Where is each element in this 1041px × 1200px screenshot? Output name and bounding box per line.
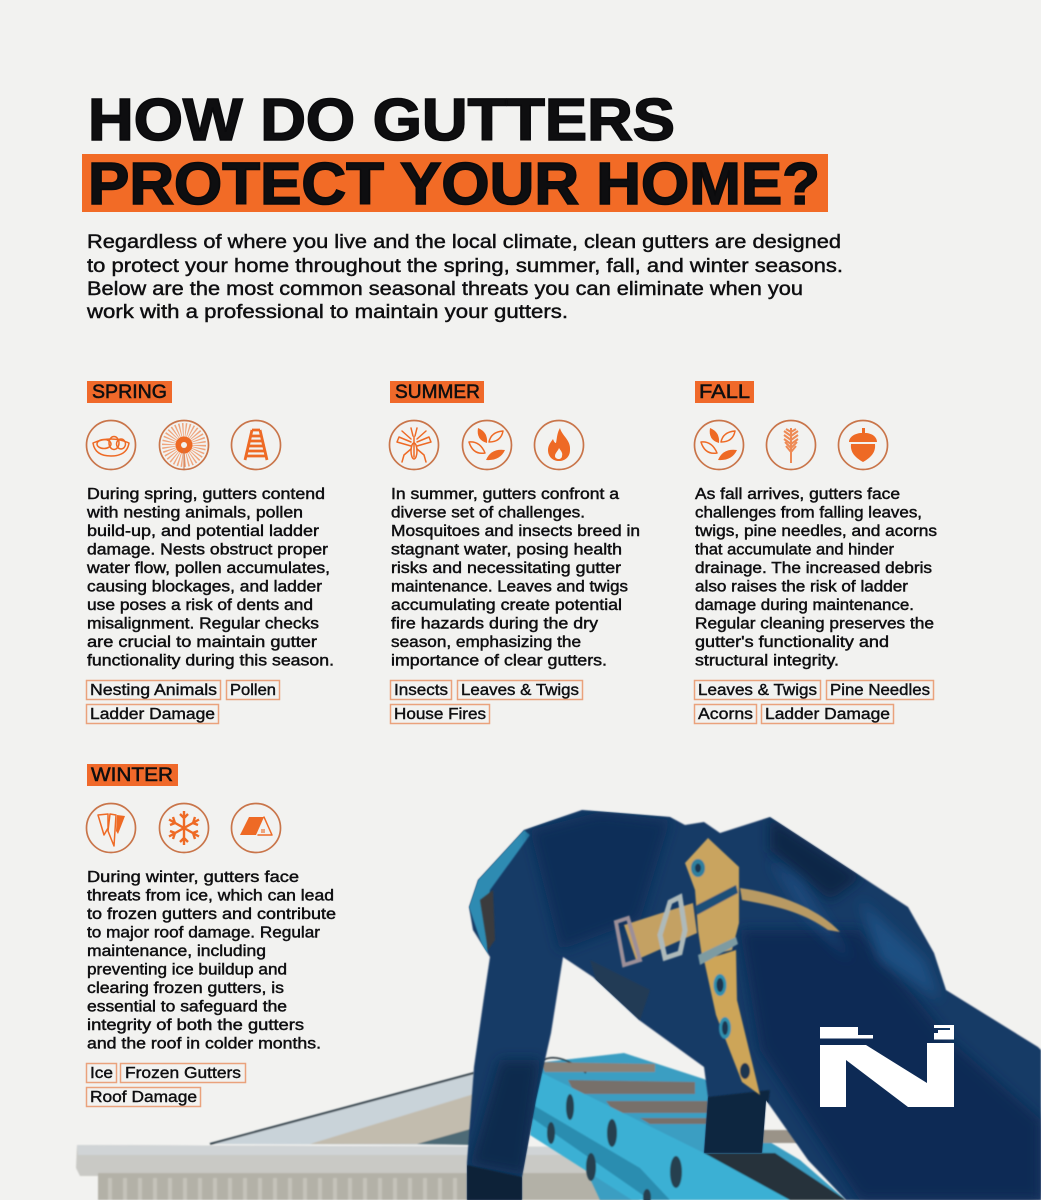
body text: fall: that accumulate and hinder xyxy=(695,542,894,558)
tags: fall: Ladder Damage xyxy=(765,706,890,723)
icon: mosquito xyxy=(390,420,438,470)
tags: winter: Frozen Gutters xyxy=(125,1065,241,1082)
intro paragraph: to protect your home throughout the spring, summer, fall, and winter seasons. xyxy=(87,255,843,277)
icon: acorn xyxy=(838,420,888,470)
body text: winter xyxy=(87,869,336,1052)
body text: fall: As fall arrives, gutters face xyxy=(695,486,900,503)
tags: summer: Leaves & Twigs xyxy=(461,682,579,699)
tags: winter: Ice xyxy=(90,1065,113,1082)
body text: spring: build-up, and potential ladder xyxy=(87,523,319,540)
body text: winter: threats from ice, which can lead xyxy=(87,888,334,904)
body text: fall: challenges from falling leaves, xyxy=(695,504,922,522)
body text: winter: clearing frozen gutters, is xyxy=(87,980,284,997)
tags: summer: Insects xyxy=(394,682,448,699)
ladder xyxy=(530,1053,846,1200)
body text: fall: gutter's functionality and xyxy=(695,634,889,651)
intro paragraph xyxy=(86,231,843,323)
intro paragraph: Regardless of where you live and the local climate, clean gutters are designed xyxy=(87,231,841,253)
body text: fall: structural integrity. xyxy=(695,652,839,670)
tags: winter: Roof Damage xyxy=(90,1089,197,1106)
icon: pine needles xyxy=(766,420,816,470)
body text: summer xyxy=(391,486,640,670)
heading: fall: FALL xyxy=(699,381,750,403)
body text: spring: with nesting animals, pollen xyxy=(86,504,303,522)
house roof and gutter xyxy=(76,1073,640,1200)
heading: spring: SPRING xyxy=(92,381,167,403)
body text: fall: drainage. The increased debris xyxy=(695,560,932,577)
tags: summer: House Fires xyxy=(394,706,486,723)
body text: spring: During spring, gutters contend xyxy=(87,486,325,503)
tags: fall: Pine Needles xyxy=(830,682,930,699)
body text: fall: twigs, pine needles, and acorns xyxy=(695,523,937,540)
panel: fall xyxy=(694,381,937,724)
icon: pollen xyxy=(160,420,208,470)
tags: fall: Leaves & Twigs xyxy=(698,682,817,699)
body text: spring: causing blockages, and ladder xyxy=(87,578,322,596)
icon: nest with eggs xyxy=(86,420,136,470)
tags: spring xyxy=(86,680,280,724)
body text: spring: misalignment. Regular checks xyxy=(87,616,319,632)
body text: winter: to frozen gutters and contribute xyxy=(87,906,336,923)
tags: winter xyxy=(86,1064,246,1106)
body text: winter: to major roof damage. Regular xyxy=(87,924,320,942)
icon: snowflake xyxy=(160,804,208,852)
heading: summer: SUMMER xyxy=(395,381,480,403)
tags: summer xyxy=(390,680,582,724)
body text: spring: functionality during this season. xyxy=(87,652,334,670)
tags: spring: Ladder Damage xyxy=(90,706,215,723)
body text: fall: also raises the risk of ladder xyxy=(695,578,908,596)
body text: winter: maintenance, including xyxy=(87,943,266,960)
title xyxy=(82,87,828,217)
panel: winter xyxy=(86,764,336,1106)
body text: summer: season, emphasizing the xyxy=(391,634,581,651)
icon: leaves xyxy=(694,420,744,470)
intro paragraph: work with a professional to maintain your gutters. xyxy=(86,301,568,323)
icon: roof damage xyxy=(232,804,280,852)
panel: spring xyxy=(86,381,334,724)
body text: winter: During winter, gutters face xyxy=(87,869,299,886)
title highlight bar xyxy=(82,154,828,212)
body text: fall: damage during maintenance. xyxy=(695,597,914,614)
body text: fall: Regular cleaning preserves the xyxy=(695,616,934,632)
panel: summer xyxy=(390,381,640,724)
body text: winter: and the roof in colder months. xyxy=(87,1036,321,1052)
body text: spring: damage. Nests obstruct proper xyxy=(87,542,328,558)
body text: summer: risks and necessitating gutter xyxy=(391,560,621,577)
body text: summer: maintenance. Leaves and twigs xyxy=(391,578,628,596)
icon: leaves and twigs xyxy=(462,420,512,470)
body text: spring: use poses a risk of dents and xyxy=(87,597,313,614)
title line 2: PROTECT YOUR HOME? xyxy=(88,151,820,217)
tags: fall: Acorns xyxy=(698,706,753,723)
body text: winter: integrity of both the gutters xyxy=(87,1017,304,1034)
photo: worker on ladder against house xyxy=(76,810,1041,1200)
body text: summer: diverse set of challenges. xyxy=(391,504,585,522)
icon: ladder xyxy=(232,420,280,470)
body text: winter: preventing ice buildup and xyxy=(87,962,287,978)
tags: spring: Pollen xyxy=(230,682,276,699)
body text: spring: water flow, pollen accumulates, xyxy=(86,560,330,577)
body text: summer: fire hazards during the dry xyxy=(391,616,598,632)
body text: summer: Mosquitoes and insects breed in xyxy=(391,523,640,540)
body text: summer: stagnant water, posing health xyxy=(391,542,622,558)
body text: summer: In summer, gutters confront a xyxy=(391,486,619,503)
body text: spring xyxy=(86,486,334,670)
body text: summer: accumulating create potential xyxy=(391,597,622,614)
icon: fire xyxy=(534,420,584,470)
intro paragraph: Below are the most common seasonal threats you can eliminate when you xyxy=(87,278,803,300)
logo xyxy=(820,1025,954,1107)
title line 1: HOW DO GUTTERS xyxy=(88,87,675,153)
worker in navy coveralls xyxy=(467,810,1041,1200)
heading: winter: WINTER xyxy=(91,764,173,786)
tags: fall xyxy=(694,680,934,724)
safety harness xyxy=(616,838,840,1095)
body text: spring: are crucial to maintain gutter xyxy=(87,634,317,651)
tags: spring: Nesting Animals xyxy=(90,682,217,699)
body text: fall xyxy=(695,486,937,670)
body text: summer: importance of clear gutters. xyxy=(391,652,607,670)
icon: icicles xyxy=(86,804,136,852)
body text: winter: essential to safeguard the xyxy=(87,998,287,1016)
